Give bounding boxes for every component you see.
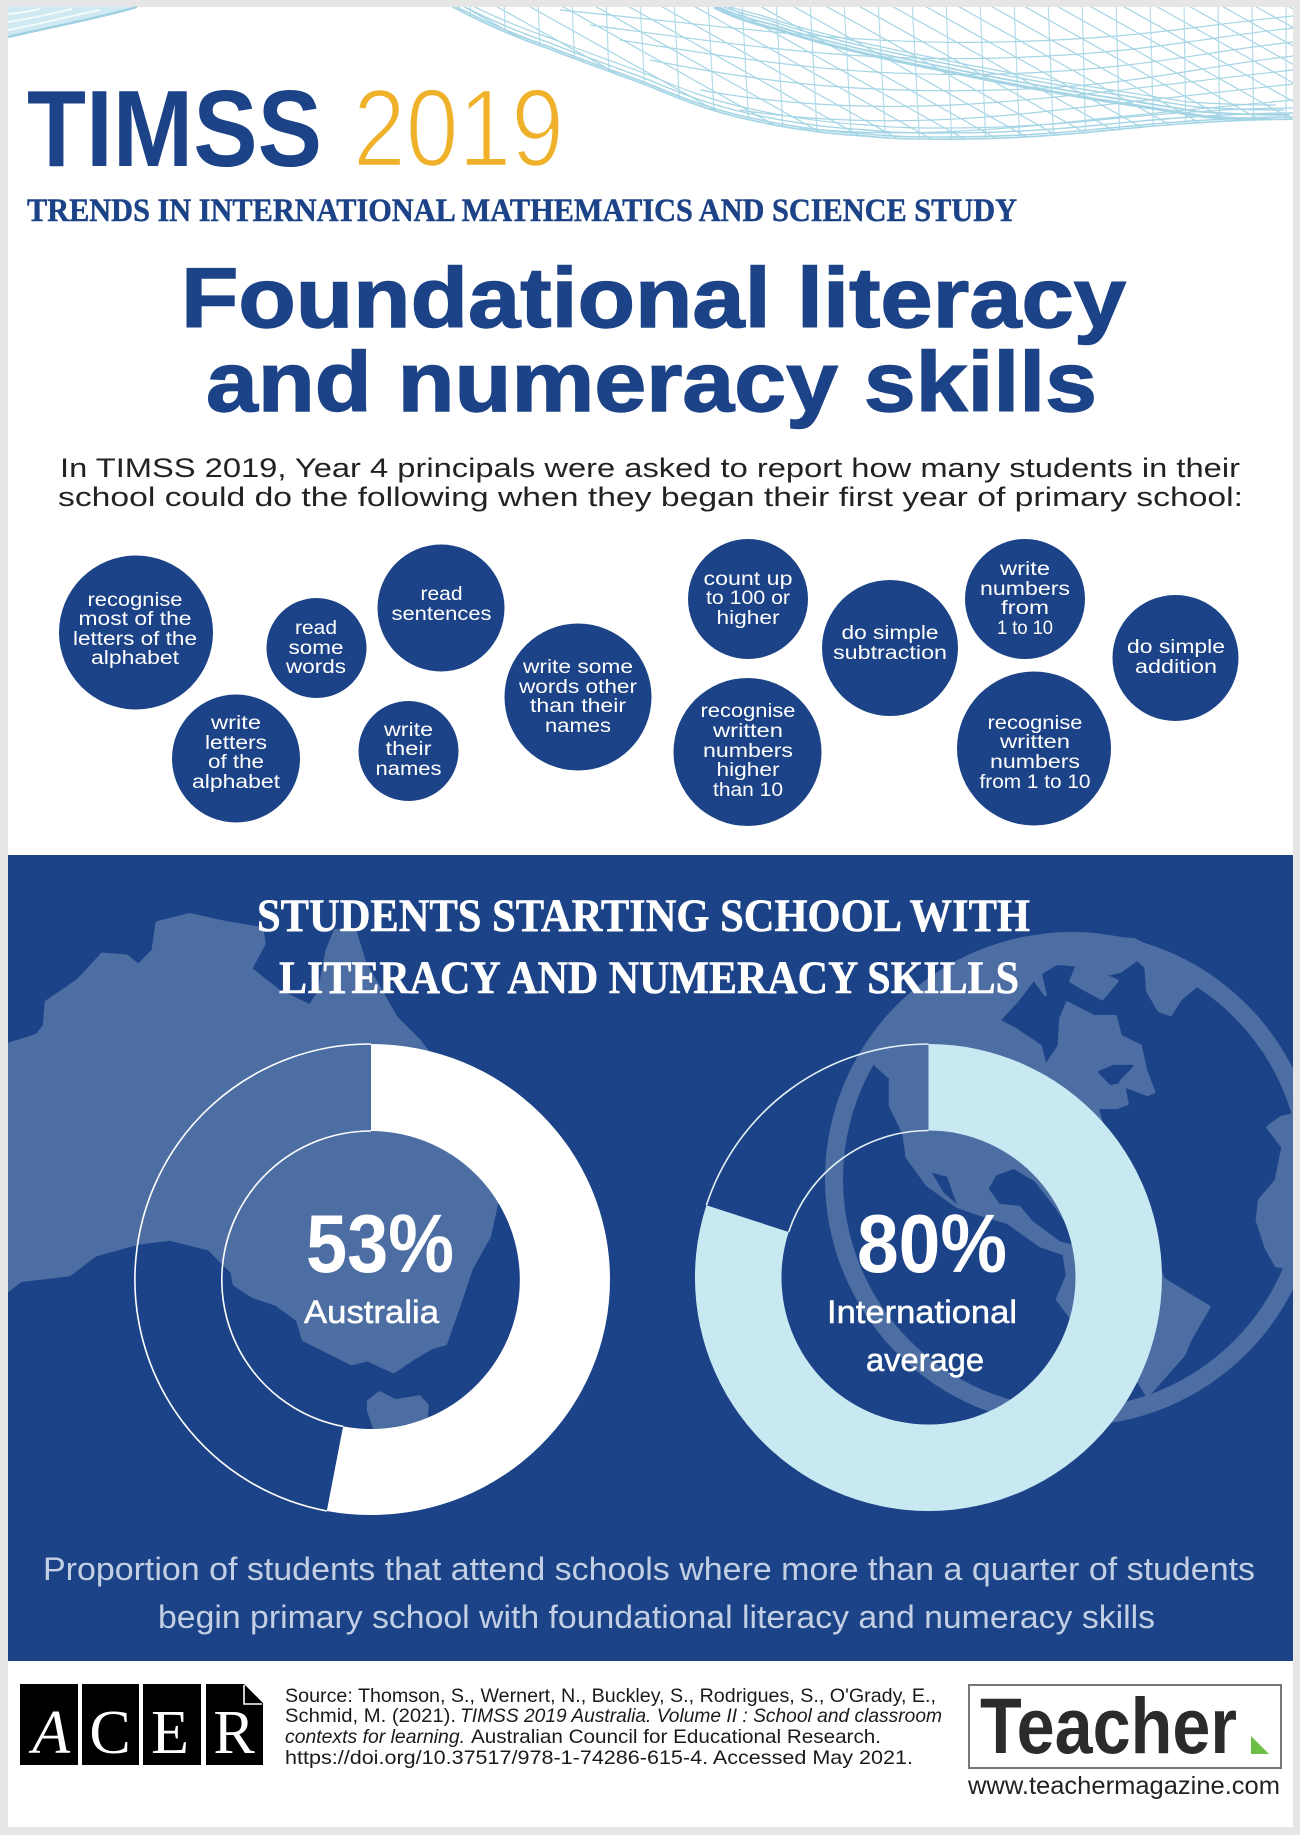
bubble: read some words: read bbox=[295, 618, 337, 639]
logo: Teacher: Teacher bbox=[980, 1681, 1237, 1770]
donut chart: International average 80%: International bbox=[827, 1294, 1017, 1330]
bubble: read some words: words bbox=[285, 657, 346, 678]
title logo TIMSS 2019: TIMSS bbox=[27, 68, 322, 190]
main heading: and numeracy skills bbox=[206, 335, 1097, 429]
bubble: write some words other than their names: than their bbox=[530, 696, 627, 717]
logo: ACER bbox=[20, 1684, 263, 1767]
bubble: read sentences: sentences bbox=[392, 604, 492, 625]
decorative wave corner top left bbox=[8, 7, 137, 38]
main heading: Foundational literacy bbox=[181, 251, 1126, 345]
panel heading: LITERACY AND NUMERACY SKILLS bbox=[279, 952, 1019, 1004]
bubble: write letters of the alphabet: alphabet bbox=[192, 772, 281, 793]
panel caption: Proportion of students that attend schools where more than a quarter of students bbox=[43, 1551, 1255, 1587]
bubble: write letters of the alphabet: write bbox=[210, 713, 261, 734]
bubble: write letters of the alphabet: letters bbox=[205, 733, 267, 754]
source citation: Source: Thomson, S., Wernert, N., Buckley, S., Rodrigues, S., O'Grady, E., bbox=[285, 1685, 936, 1707]
logo: ACER: A bbox=[28, 1699, 71, 1767]
bubble: write their names bbox=[358, 701, 458, 801]
bubble: count up to 100 or higher: to 100 or bbox=[706, 588, 791, 609]
bubble: read sentences: read bbox=[420, 584, 462, 605]
donut chart: Australia 53%: 53% bbox=[306, 1197, 454, 1290]
map of Australia background bbox=[0, 916, 496, 1428]
website url: www.teachermagazine.com bbox=[967, 1772, 1280, 1800]
bubble: recognise written numbers from 1 to 10: numbers bbox=[990, 752, 1080, 773]
bubble: write their names: names bbox=[376, 759, 442, 780]
donut chart: Australia 53% bbox=[135, 1044, 610, 1515]
bubble: recognise most of the letters of the alphabet: recognise bbox=[88, 590, 182, 611]
source citation: contexts for learning. bbox=[285, 1726, 465, 1748]
bubble: recognise written numbers higher than 10: than 10 bbox=[713, 780, 783, 801]
bubble: recognise most of the letters of the alphabet: letters of the bbox=[73, 629, 197, 650]
bubble: recognise written numbers higher than 10: higher bbox=[716, 760, 780, 781]
bubble: write numbers from 1 to 10 bbox=[965, 539, 1085, 659]
panel caption bbox=[43, 1551, 1255, 1635]
bubble: recognise written numbers from 1 to 10: written bbox=[999, 732, 1070, 753]
source citation: Schmid, M. (2021). bbox=[285, 1705, 456, 1727]
logo: ACER: C bbox=[89, 1699, 131, 1767]
bubble: recognise written numbers from 1 to 10: from 1 to 10 bbox=[980, 772, 1090, 793]
intro text bbox=[58, 453, 1243, 512]
bubble: write numbers from 1 to 10: 1 to 10 bbox=[997, 618, 1053, 639]
title logo TIMSS 2019: 2019 bbox=[353, 67, 564, 190]
bubble: write their names: write bbox=[383, 720, 433, 741]
bubble: do simple subtraction: subtraction bbox=[833, 643, 947, 664]
bubble: write some words other than their names: write some bbox=[522, 657, 633, 678]
bubble: recognise written numbers higher than 10: recognise bbox=[700, 701, 796, 722]
bubble: read some words bbox=[266, 598, 366, 698]
logo: ACER: R bbox=[213, 1699, 255, 1767]
donut chart: International average 80%: average bbox=[866, 1342, 984, 1378]
bubble: count up to 100 or higher: higher bbox=[716, 608, 780, 629]
donut chart: Australia 53%: Australia bbox=[304, 1294, 439, 1330]
bubble: write numbers from 1 to 10: numbers bbox=[980, 579, 1070, 600]
subtitle: TRENDS IN INTERNATIONAL MATHEMATICS AND SCIENCE STUDY bbox=[27, 193, 1017, 229]
bubble: recognise most of the letters of the alphabet: alphabet bbox=[91, 648, 180, 669]
intro text: school could do the following when they began their first year of primary school: bbox=[58, 482, 1243, 512]
source citation: TIMSS 2019 Australia. Volume II : School and classroom bbox=[460, 1705, 942, 1727]
bubble: recognise most of the letters of the alphabet: most of the bbox=[78, 609, 192, 630]
donut chart: International average 80% bbox=[695, 1044, 1162, 1511]
logo: ACER: E bbox=[151, 1699, 189, 1767]
bubble: write letters of the alphabet bbox=[172, 694, 300, 822]
bubble: write some words other than their names bbox=[504, 624, 652, 770]
bubble: do simple addition: addition bbox=[1135, 657, 1217, 678]
bubble: do simple addition bbox=[1112, 595, 1238, 721]
bubble: recognise written numbers from 1 to 10: recognise bbox=[988, 713, 1082, 734]
source citation: Australian Council for Educational Research. bbox=[471, 1726, 881, 1748]
bubble: write numbers from 1 to 10: write bbox=[999, 559, 1050, 580]
bubble: do simple subtraction: do simple bbox=[842, 623, 938, 644]
bubble: recognise written numbers higher than 10: numbers bbox=[703, 741, 793, 762]
bubble: write letters of the alphabet: of the bbox=[208, 752, 264, 773]
panel caption: begin primary school with foundational literacy and numeracy skills bbox=[158, 1599, 1155, 1635]
globe background bbox=[825, 932, 1300, 1426]
bubble: write some words other than their names: words other bbox=[518, 677, 638, 698]
bubble: read sentences bbox=[378, 544, 504, 672]
panel heading bbox=[257, 890, 1030, 1004]
donut chart: International average 80%: 80% bbox=[857, 1197, 1007, 1290]
title logo TIMSS 2019 bbox=[27, 67, 564, 190]
bubble: count up to 100 or higher bbox=[688, 539, 808, 659]
panel heading: STUDENTS STARTING SCHOOL WITH bbox=[257, 890, 1030, 942]
bubble: do simple addition: do simple bbox=[1127, 637, 1225, 658]
source citation: https://doi.org/10.37517/978-1-74286-615-4. Accessed May 2021. bbox=[285, 1747, 913, 1769]
bubble: write some words other than their names: names bbox=[545, 716, 611, 737]
bubble: count up to 100 or higher: count up bbox=[704, 569, 792, 590]
bubble: write their names: their bbox=[386, 739, 432, 760]
bubble: read some words: some bbox=[288, 638, 344, 659]
main heading bbox=[181, 251, 1126, 429]
bubble: recognise most of the letters of the alphabet bbox=[59, 556, 213, 710]
bubble: do simple subtraction bbox=[822, 580, 958, 716]
skills bubbles bbox=[59, 539, 1238, 826]
bubble: write numbers from 1 to 10: from bbox=[1001, 598, 1049, 619]
decorative wave mesh top right bbox=[451, 7, 1293, 140]
bubble: recognise written numbers higher than 10 bbox=[674, 678, 822, 826]
panel: students starting school bbox=[0, 855, 1300, 1661]
bubble: recognise written numbers from 1 to 10 bbox=[957, 672, 1111, 826]
bubble: recognise written numbers higher than 10: written bbox=[712, 721, 783, 742]
intro text: In TIMSS 2019, Year 4 principals were asked to report how many students in their bbox=[60, 453, 1240, 483]
source citation bbox=[285, 1685, 942, 1769]
